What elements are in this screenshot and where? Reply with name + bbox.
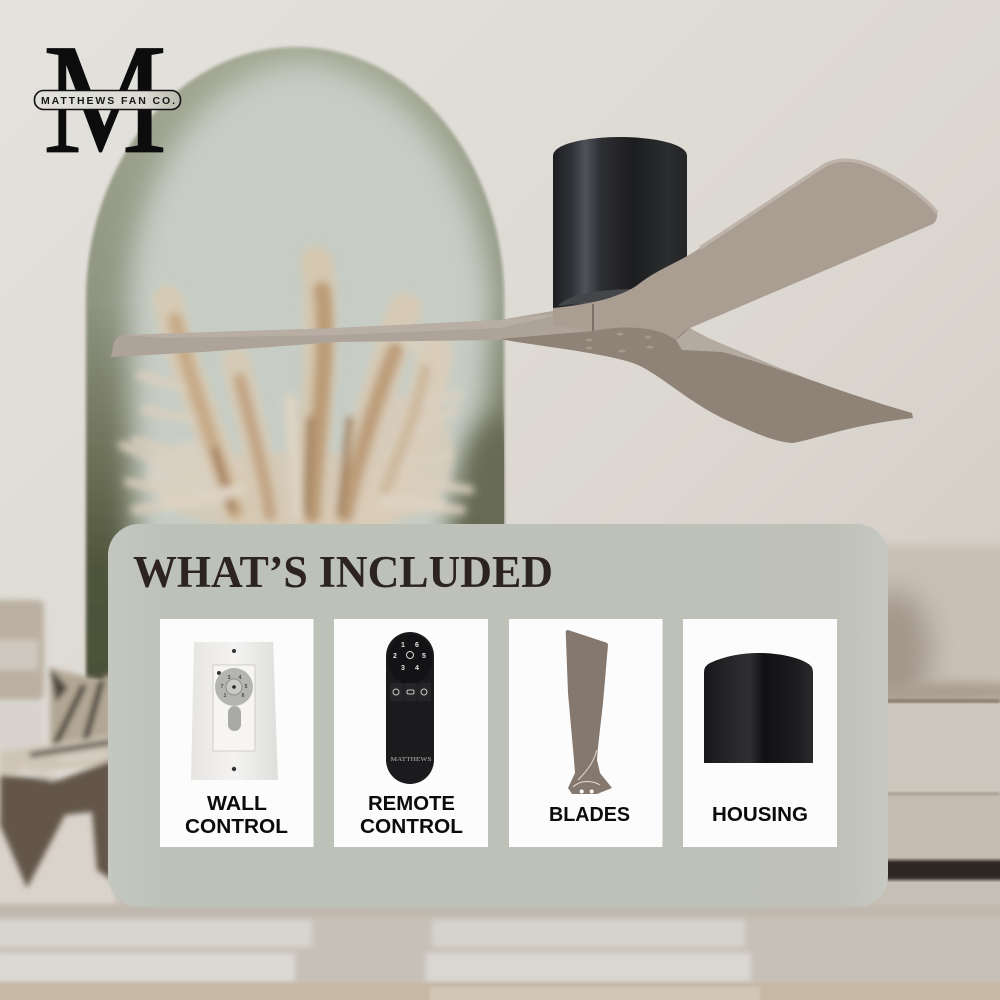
icon: remote: 1 bbox=[401, 642, 405, 649]
label: remote control: CONTROL bbox=[360, 816, 463, 838]
pampas grass bbox=[122, 262, 470, 532]
heading: WHAT’S INCLUDED bbox=[133, 547, 553, 597]
sofa left bbox=[0, 600, 44, 758]
card: wall control bbox=[160, 619, 314, 847]
icon: wall control bbox=[191, 642, 278, 780]
logo bbox=[34, 12, 180, 187]
card: remote control bbox=[334, 619, 488, 847]
arched niche bbox=[86, 47, 538, 680]
icon: remote: 6 bbox=[415, 642, 419, 649]
fan motor housing bbox=[553, 137, 687, 309]
label: housing: HOUSING bbox=[712, 804, 808, 826]
logo name pill: MATTHEWS FAN CO. bbox=[41, 95, 175, 107]
icon: remote: 5 bbox=[422, 653, 426, 660]
icon: wall control: 5 bbox=[245, 684, 248, 690]
logo name pill bbox=[34, 90, 180, 110]
label: blades: BLADES bbox=[549, 804, 630, 826]
label: wall control: CONTROL bbox=[185, 816, 288, 838]
icon: remote bbox=[386, 632, 434, 784]
icon: wall control: 7 bbox=[221, 684, 224, 690]
icon: remote: MATTHEWS bbox=[390, 756, 432, 763]
card: housing bbox=[683, 619, 837, 847]
icon: wall control: 1 bbox=[224, 693, 227, 699]
left blade bbox=[111, 303, 600, 357]
lower blade and hub underside bbox=[500, 322, 913, 443]
floor bbox=[0, 815, 1000, 1000]
ceiling fan bbox=[111, 137, 937, 443]
sofa right bbox=[859, 545, 1000, 880]
card: blades bbox=[509, 619, 662, 847]
panel: what's included bbox=[108, 524, 888, 907]
throw blanket bbox=[0, 668, 112, 888]
icon: wall control: 4 bbox=[239, 675, 242, 681]
label: remote control: REMOTE bbox=[368, 793, 455, 815]
icon: wall control: 6 bbox=[242, 693, 245, 699]
icon: remote: 3 bbox=[401, 665, 405, 672]
icon: remote: 4 bbox=[415, 665, 419, 672]
icon: remote: 2 bbox=[393, 653, 397, 660]
logo monogram M: M bbox=[43, 12, 167, 187]
icon: housing bbox=[704, 653, 813, 763]
icon: blade bbox=[566, 630, 612, 794]
label: wall control: WALL bbox=[207, 793, 267, 815]
label: remote control bbox=[360, 793, 463, 838]
icon: wall control: 3 bbox=[228, 675, 231, 681]
upper blade bbox=[553, 160, 937, 340]
label: wall control bbox=[185, 793, 288, 838]
